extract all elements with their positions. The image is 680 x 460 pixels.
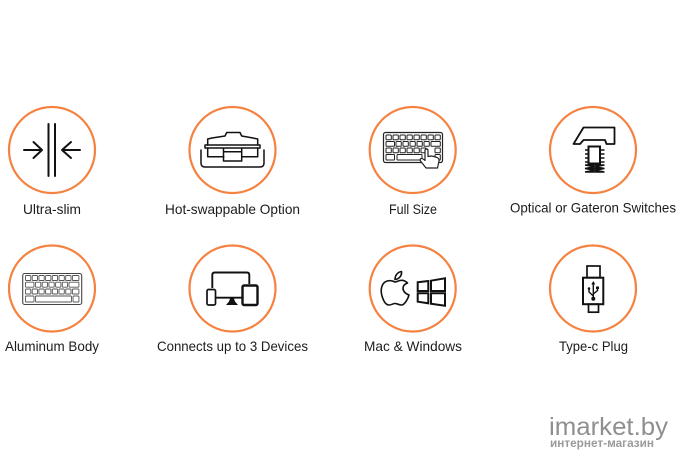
icon ring: Ultra-slim	[9, 107, 95, 193]
panel: Type-c Plug	[550, 246, 636, 354]
icon: USB plug	[583, 266, 603, 312]
label: Type-c Plug: Type-c Plug	[559, 338, 628, 354]
icon: keycap and switch	[574, 128, 614, 172]
icon: Apple logo	[381, 272, 409, 305]
icon: two lines with inward arrows	[24, 124, 80, 176]
panel: Optical or Gateron Switches	[510, 107, 676, 216]
icon: pointing hand	[420, 149, 439, 168]
icon ring: Full Size	[370, 107, 456, 193]
panel: Full Size	[370, 107, 456, 217]
icon ring: Optical or Gateron Switches	[550, 107, 636, 193]
label: Optical or Gateron Switches: Optical or Gateron Switches	[510, 200, 676, 216]
icon ring: Connects up to 3 Devices	[190, 246, 276, 332]
panel: Aluminum Body	[5, 246, 99, 354]
icon: monitor, phone and tablet	[207, 272, 258, 305]
label: Aluminum Body: Aluminum Body	[5, 338, 99, 354]
label: Hot-swappable Option: Hot-swappable Option	[165, 201, 300, 217]
watermark: imarket.by: imarket.by	[549, 413, 669, 441]
icon ring: Mac & Windows	[370, 246, 456, 332]
label: Connects up to 3 Devices: Connects up to 3 Devices	[157, 338, 308, 354]
panel: Ultra-slim	[9, 107, 95, 217]
icon: Windows logo	[418, 278, 445, 306]
label: Full Size: Full Size	[389, 201, 437, 217]
panel: Hot-swappable Option	[165, 107, 300, 217]
icon ring: Aluminum Body	[9, 246, 95, 332]
icon: aluminum keyboard	[23, 274, 82, 304]
label: Ultra-slim: Ultra-slim	[23, 201, 81, 217]
icon ring: Type-c Plug	[550, 246, 636, 332]
label: Mac & Windows: Mac & Windows	[364, 338, 462, 354]
panel: Mac & Windows	[364, 246, 462, 354]
panel: Connects up to 3 Devices	[157, 246, 308, 354]
icon ring: Hot-swappable	[190, 107, 276, 193]
icon: keyboard with pointing hand	[384, 132, 442, 168]
watermark: imarket.by: интернет-магазин	[550, 438, 654, 450]
icon: hot-swappable switch socket	[201, 132, 264, 167]
